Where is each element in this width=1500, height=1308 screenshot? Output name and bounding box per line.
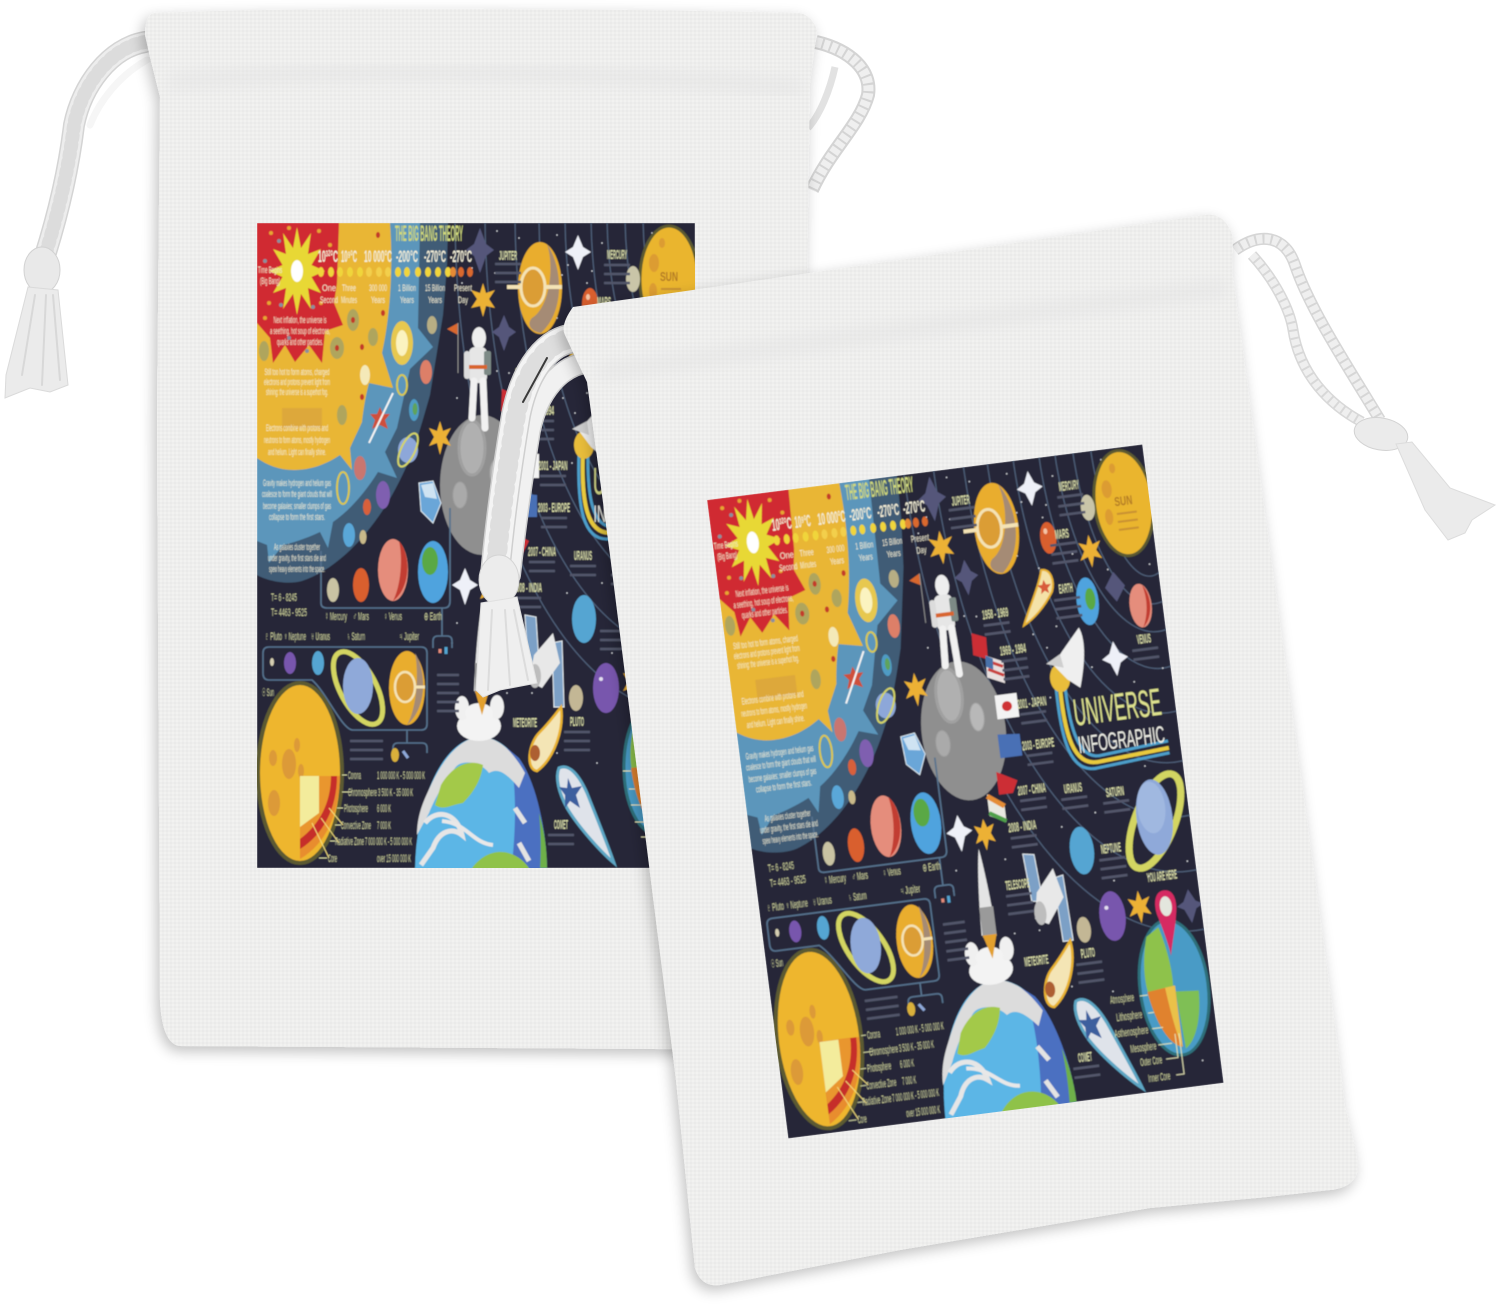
big bang narrative: quarks and other particles. [741,604,788,620]
front printed infographic: under gravity, the first stars die and [760,818,818,835]
back labels and copy: MERCURY [607,247,627,262]
back labels and copy: SUN [660,269,678,284]
planet legend: ☉ Sun [770,957,784,971]
big bang narrative: Next inflation, the universe is [735,582,789,599]
front pouch fabric [564,215,1358,1285]
sun layers table [846,1020,955,1127]
stars field [429,231,687,843]
back labels and copy: ☉ Sun [262,687,274,699]
back labels and copy: Years [400,295,414,305]
artwork instance [643,0,1464,1278]
back labels and copy: ♃ Jupiter [399,631,419,643]
planet legend: ♄ Saturn [848,890,867,904]
big sun cutaway [258,683,343,863]
inner planets panel [321,508,450,608]
back labels and copy: Gravity makes hydrogen and helium gas [263,478,331,488]
back labels and copy: 3 500 K - 35 000 K [378,787,413,799]
back pouch fabric [145,9,817,1050]
planet legend: ⊕ Earth [922,861,941,875]
object labels: JUPITER [951,492,971,509]
sun layers table: Photosphere [867,1060,892,1075]
rope: back pouch left drawstring [5,42,147,398]
sun layer connector lines [319,775,352,858]
object labels: 1958 - 1969 [981,605,1009,623]
big bang narrative: Still too hot to form atoms, charged [733,633,798,652]
back labels and copy: ♄ Saturn [347,631,365,643]
headings and timeline: Years [858,551,874,563]
back labels and copy: Photosphere [344,803,368,815]
object labels: TELESCOPE [1005,875,1031,893]
sun: top right [640,226,698,332]
back labels and copy: 7 000 K [377,820,391,832]
big bang narrative: a seething, hot soup of electrons, [733,593,794,610]
object labels: 2003 - EUROPE [1021,734,1055,753]
headings and timeline: 10³²°C [771,513,793,535]
back labels and copy: ♅ Uranus [311,631,330,643]
headings and timeline: Years [886,548,902,559]
back labels and copy: EARTH [594,349,608,364]
rope: front pouch left drawstring [476,338,590,697]
title: INFOGRAPHIC [1077,721,1166,759]
back labels and copy: Chromosphere [348,787,377,799]
back labels and copy: 15 Billion [425,283,445,293]
big bang narrative [724,582,826,847]
back labels and copy: electrons and protons prevent light from [264,377,330,387]
headings and timeline [708,471,931,581]
big bang: red burst [257,223,343,363]
connectors and mini planets [391,608,452,762]
back labels and copy: quarks and other particles. [277,337,323,347]
front printed infographic: become galaxies; smaller clumps of gas [748,766,817,784]
sun layers table: Chromosphere [869,1043,899,1059]
headings and timeline: Present [910,532,930,544]
headings and timeline: (Big Bang) [717,550,738,562]
object labels: 1969 - 1994 [999,640,1027,659]
objects on the blue bands [337,316,437,547]
headings and timeline: One [779,549,794,561]
object labels: NEPTUNE [1100,840,1122,857]
back labels and copy: collapse to form the first stars. [269,512,325,522]
headings and timeline: 300 000 [826,543,845,555]
back labels and copy: THE BIG BANG THEORY [395,221,463,246]
back labels and copy: 2003 - EUROPE [538,500,570,515]
planet legend [758,842,951,971]
back labels and copy: 2008 - INDIA [514,580,542,595]
back labels and copy: PLUTO [570,714,584,729]
object labels: COMET [1077,1049,1093,1065]
back labels and copy: ♂ Mars [353,611,369,623]
title [1071,682,1167,759]
object labels: PLUTO [1080,945,1096,961]
earth layer connector lines [623,771,657,854]
back labels and copy [258,221,681,865]
back labels and copy: 2007 - CHINA [528,544,556,559]
back labels and copy: T= 4463 - 9525 [271,607,307,619]
earth layer labels: Outer Core [1140,1055,1163,1069]
back labels and copy: JUPITER [499,248,517,263]
big bang: yellow star [269,227,325,315]
sun layers table: over 15 000 000 K [906,1104,941,1120]
back labels and copy: Radiative Zone [335,836,364,848]
astronaut [447,323,491,428]
back labels and copy: 1969 - 1994 [528,403,554,418]
back labels and copy: Corona [348,770,361,782]
infographic artwork (shapes) [257,0,919,1009]
front printed infographic: UNIVERSE [1071,682,1164,735]
outer planets panel [263,644,427,732]
back labels and copy: a seething, hot soup of electrons, [270,326,330,336]
back labels and copy: 6 000 K [377,803,391,815]
big bang: yellow disc [257,223,393,470]
earth layer labels: Mesosphere [1130,1040,1157,1055]
moon [440,415,524,555]
headings and timeline: Time Begins [713,538,739,551]
sun layers table: Radiative Zone [862,1093,892,1109]
planet legend: ♀ Venus [882,866,902,880]
back labels and copy: Electrons combine with protons and [266,423,328,433]
sun layers table: Convective Zone [866,1077,897,1092]
mini comet [555,335,589,388]
back labels and copy: Three [342,283,356,293]
back labels and copy: Years [371,295,385,305]
headings and timeline: -200°C [848,503,872,525]
mercury, mars planets [582,266,640,320]
back labels and copy: Second [320,295,338,305]
front printed infographic: Gravity makes hydrogen and helium gas [745,743,814,762]
earth cross-section with pin [624,669,692,835]
back labels and copy: 2001 - JAPAN [538,458,568,473]
back printed infographic: UNIVERSE [593,461,681,503]
headings and timeline: Second [779,561,798,573]
back labels and copy: ♆ Neptune [284,631,306,643]
headings and timeline: 1 Billion [855,539,874,551]
earth layer labels [1109,989,1171,1089]
headings and timeline: Day [916,544,927,556]
planets: saturn, neptune, uranus, pluto [569,545,701,713]
back labels and copy: URANUS [574,548,592,563]
headings and timeline: 10⁹°C [794,511,812,532]
rope: back pouch right drawstring [808,42,868,190]
back labels and copy: 1 000 000 K - 5 000 000 K [377,770,425,782]
telescope [525,615,564,707]
crystal [419,481,441,523]
object labels: VENUS [1136,631,1152,647]
back labels and copy: COMET [554,817,568,832]
big earth [415,737,547,1009]
object labels: METEORITE [1023,952,1049,969]
planet legend: ☿ Mercury [823,873,847,887]
big bang narrative: electrons and protons prevent light from [733,643,800,661]
big bang narrative: neutrons to form atoms, mostly hydrogen [741,701,808,719]
big bang narrative: Electrons combine with protons and [741,689,804,707]
back labels and copy: 1958 - 1969 [515,365,541,380]
front printed infographic: coalesce to form the giant clouds that will [745,754,816,773]
big bang narrative: collapse to form the first stars. [755,777,812,794]
big bang: dark-blue band [257,223,448,583]
headings and timeline: Three [799,547,814,559]
back labels and copy: (Big Bang) [260,276,280,286]
back labels and copy: ☿ Mercury [325,611,347,623]
back labels and copy: T= 6 - 8245 [271,592,297,604]
back labels and copy: coalesce to form the giant clouds that will [262,489,332,499]
front printed infographic: 7 000 000 K - 5 000 000 K [892,1087,940,1105]
back labels and copy: Minutes [341,295,357,305]
planet legend: T= 4463 - 9525 [769,874,807,890]
meteor [530,707,562,771]
back labels and copy: 10 000°C [364,247,392,266]
sun layers table: Core [857,1114,867,1127]
object labels: 2001 - JAPAN [1016,693,1047,712]
big bang: light-blue band [257,223,433,563]
orbit lines [455,0,919,713]
back labels and copy: and helium. Light can finally shine. [268,447,326,457]
back labels and copy: METEORITE [513,715,537,730]
back labels and copy: shining: the universe is a superhot fog. [266,387,328,397]
big bang narrative: shining: the universe is a superhot fog. [737,653,799,671]
front printed infographic: Inner Core [1148,1071,1171,1085]
front pouch [554,213,1362,1297]
planet legend: ♃ Jupiter [900,883,921,898]
planet legend: T= 6 - 8245 [767,860,795,875]
back labels and copy: 7 000 000 K - 5 000 000 K [365,836,412,848]
object labels: URANUS [1063,779,1083,796]
flags [497,389,539,581]
planet legend: ♇ Pluto [766,901,785,915]
back labels and copy: MARS [597,294,611,309]
back labels and copy: Convective Zone [341,820,371,832]
sun layers table: 7 000 K [902,1074,917,1088]
object labels: MARS [1054,525,1070,542]
headings and timeline: Minutes [800,559,817,571]
earth layer labels: Atmosphere [1109,992,1135,1007]
headings and timeline: 15 Billion [882,536,903,548]
back labels and copy: ♀ Venus [384,611,402,623]
sun layers table: Corona [866,1028,881,1042]
planet legend: ♅ Uranus [812,895,833,909]
back labels and copy: Next inflation, the universe is [274,315,327,325]
back labels and copy: -270°C [424,247,446,266]
back labels and copy: Time Begins [258,265,282,275]
particles on the burst and yellow disc [259,228,385,428]
timeline dots [318,267,473,277]
back labels and copy: ⊕ Earth [424,611,442,623]
back labels and copy: Day [458,295,468,305]
earth layer labels: Lithosphere [1116,1009,1143,1024]
planet legend: ♂ Mars [851,870,869,884]
big bang narrative: and helium. Light can finally shine. [746,713,805,730]
earth layer labels: Asthenosphere [1114,1024,1149,1040]
planet legend: ♆ Neptune [785,898,809,912]
back labels and copy: over 15 000 000 K [377,853,411,865]
headings and timeline: -270°C [876,500,900,521]
back labels and copy: spew heavy elements into the space. [269,564,325,574]
back labels and copy: 300 000 [369,283,387,293]
back labels and copy: 10⁹°C [341,247,357,266]
back labels and copy: ♇ Pluto [265,631,282,643]
back labels and copy: Years [428,295,442,305]
earth and venus [610,348,684,405]
back labels and copy: under gravity, the first stars die and [268,553,326,563]
object labels: YOU ARE HERE [1146,867,1178,885]
object labels: EARTH [1058,580,1074,597]
back labels and copy: Still too hot to form atoms, charged [264,367,330,377]
back labels and copy: neutrons to form atoms, mostly hydrogen [264,435,330,445]
front printed infographic: spew heavy elements into the space. [762,829,819,846]
object labels: 2008 - INDIA [1007,817,1037,836]
back printed infographic [257,223,695,868]
comet [557,767,614,863]
big bang narrative: As galaxies cluster together [764,808,811,824]
back labels and copy: One [322,283,336,293]
jupiter top [507,242,562,334]
object labels: SUN [1113,492,1133,509]
object labels: MERCURY [1058,477,1080,494]
back labels and copy: 1 Billion [398,283,416,293]
back labels and copy: Present [454,283,472,293]
headings and timeline: Years [829,555,845,567]
object labels: SATURN [1105,783,1125,800]
back labels and copy: become galaxies; smaller clumps of gas [263,501,331,511]
sun layers table: 6 000 K [899,1057,915,1071]
object labels [951,470,1203,1072]
back labels and copy: -200°C [396,247,418,266]
back pouch [5,0,919,1050]
title rainbow and shuttle [572,397,683,539]
sun layers table: 3 500 K - 35 000 K [898,1039,935,1055]
placeholder text bars [350,264,685,844]
back labels and copy: As galaxies cluster together [274,542,320,552]
stars [429,228,697,705]
front printed infographic: 1 000 000 K - 5 000 000 K [895,1020,945,1038]
back labels and copy: -270°C [450,247,472,266]
back labels and copy: Core [328,853,337,865]
front printed infographic [643,0,1464,1278]
rocket and smoke [455,604,504,741]
headings and timeline: 10 000°C [816,507,847,529]
front printed infographic: THE BIG BANG THEORY [844,472,915,505]
object labels: 2007 - CHINA [1017,780,1047,798]
rope: front pouch right drawstring [1235,239,1495,540]
back labels and copy: 10³²°C [318,247,338,266]
headings and timeline: -270°C [902,496,926,518]
back labels and copy: INFOGRAPHIC [594,501,680,528]
